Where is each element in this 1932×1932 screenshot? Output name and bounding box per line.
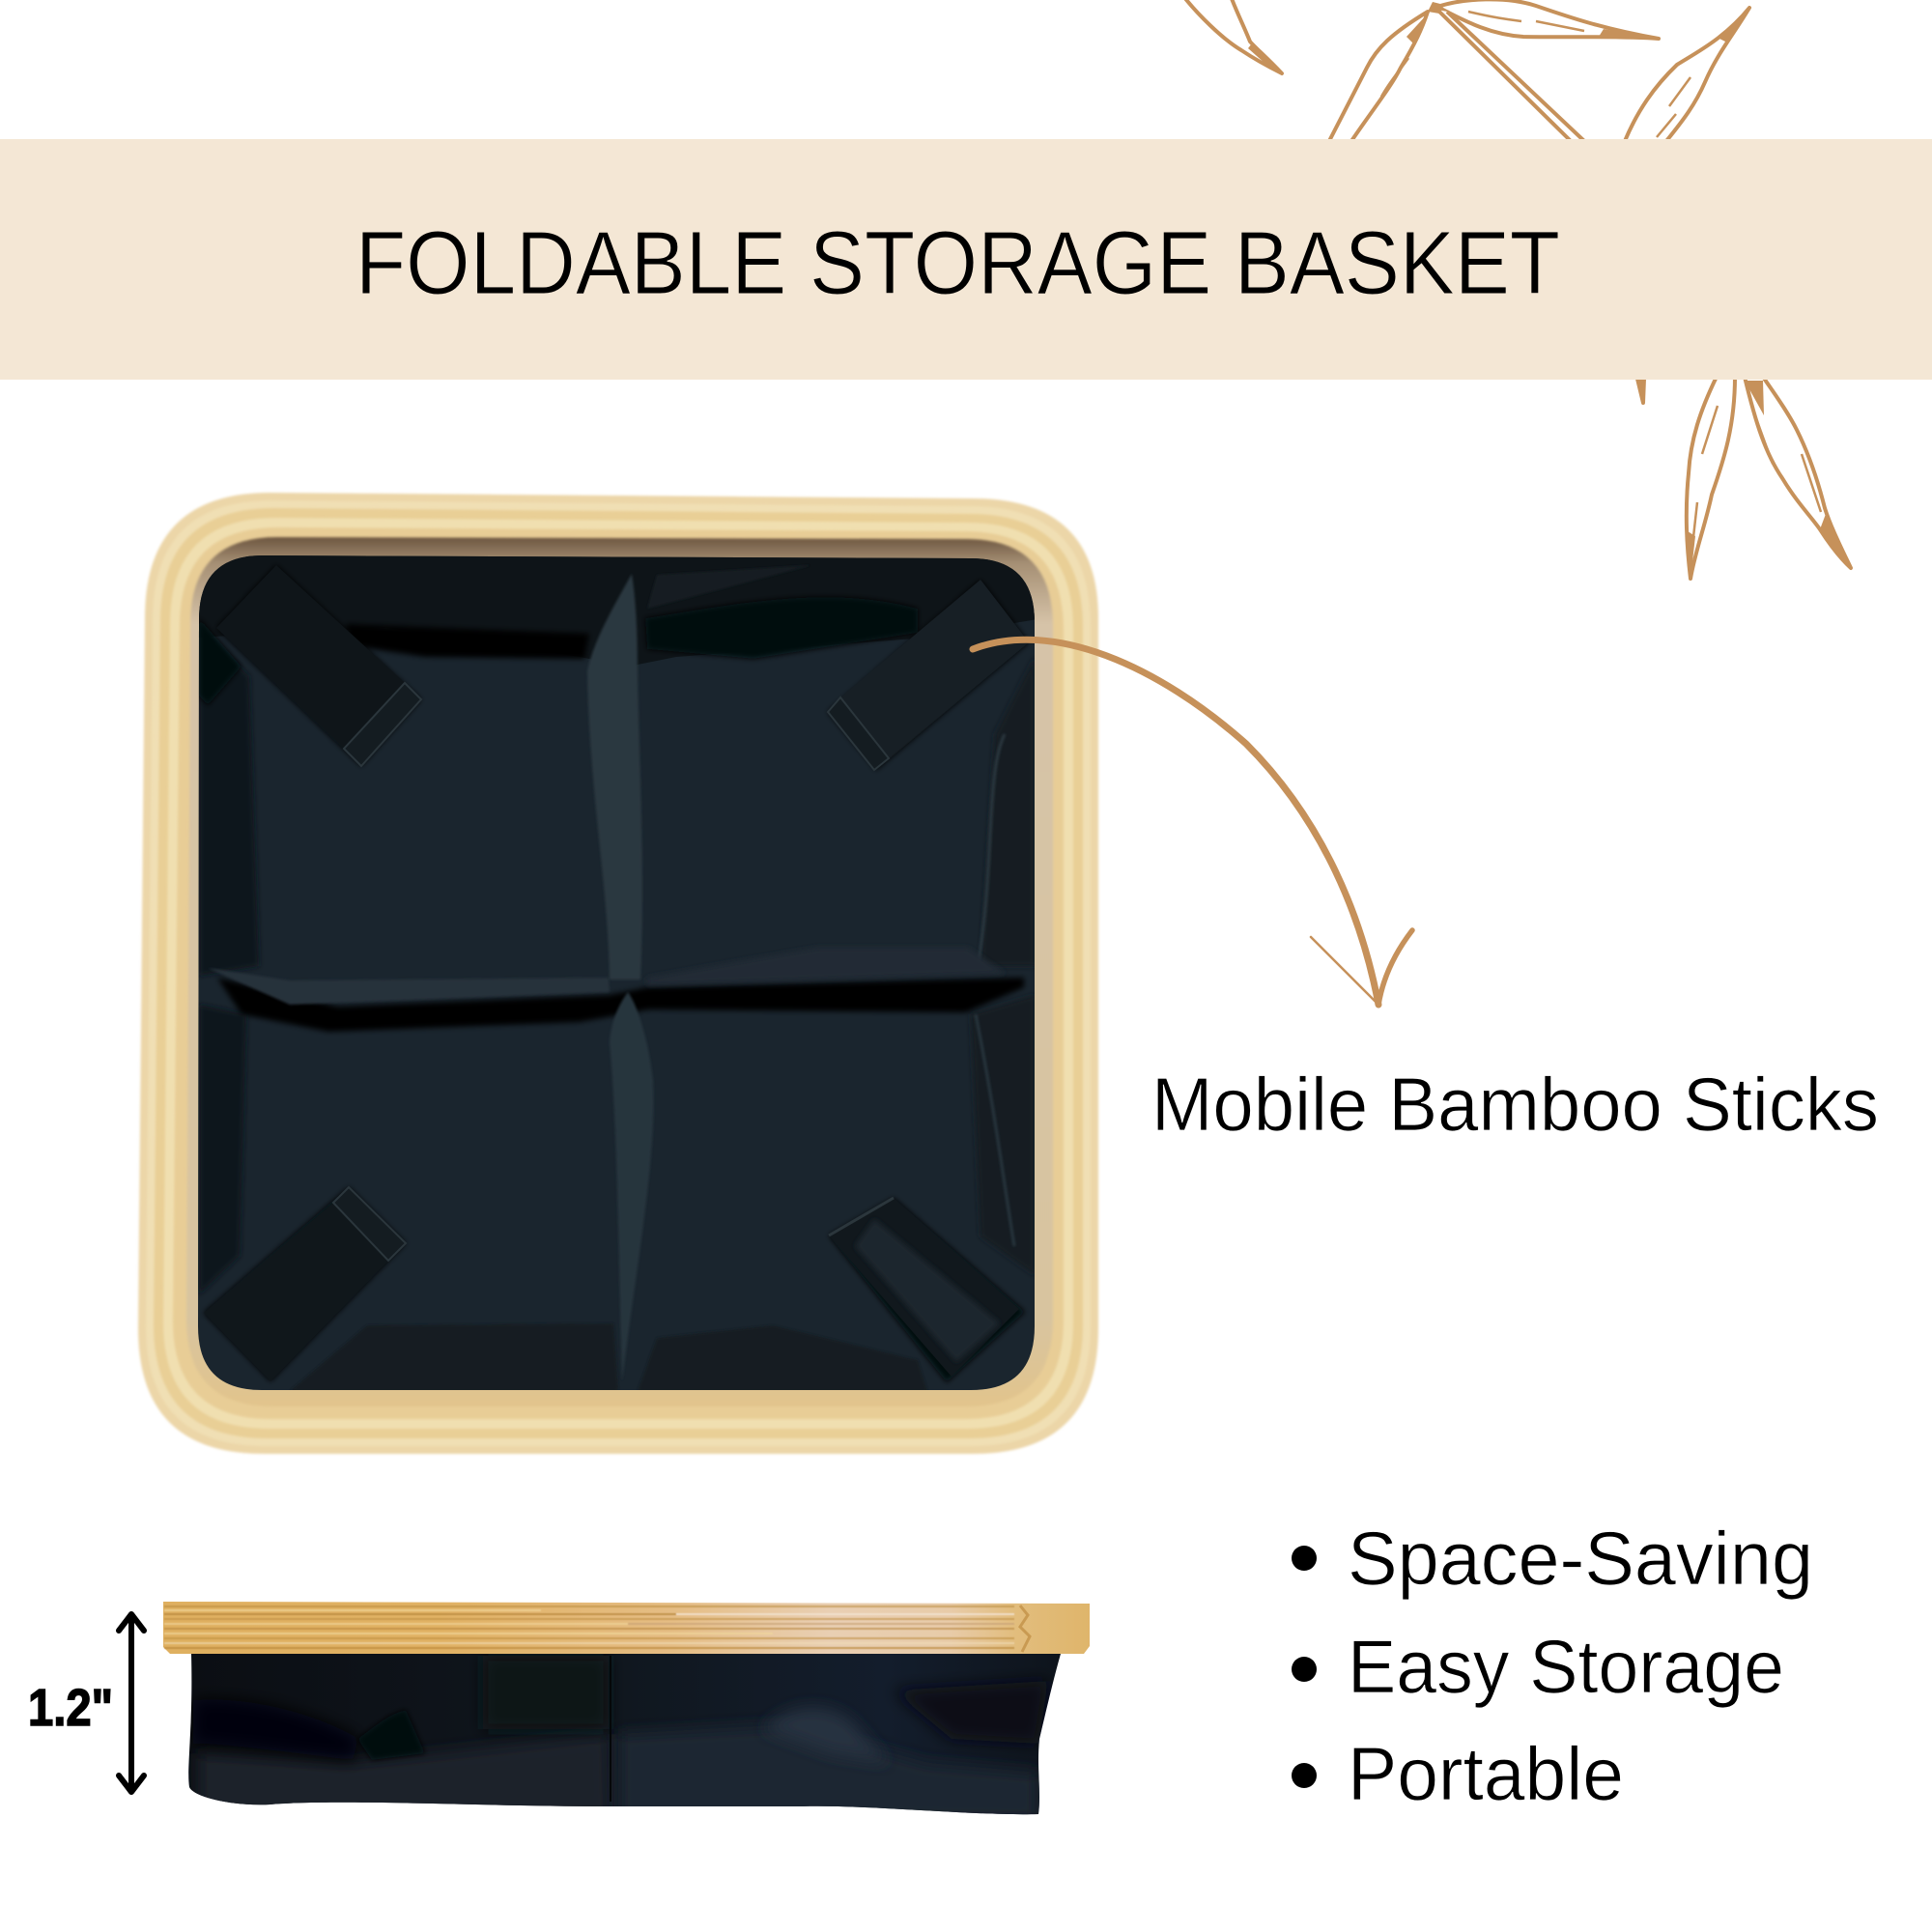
height label: 1.2" [28, 1679, 113, 1737]
callout label: Mobile Bamboo Sticks [1151, 1062, 1879, 1147]
dimension arrow [119, 1614, 144, 1792]
feature: portable: Portable [1348, 1731, 1624, 1816]
feature list [1292, 1516, 1813, 1816]
vertical divider [587, 574, 642, 980]
straps [199, 565, 1029, 1382]
bottom band [290, 1323, 618, 1391]
decorative bamboo leaves [1183, 0, 1851, 579]
top shadow band [193, 551, 1043, 667]
feature: space-saving: Space-Saving [1348, 1516, 1813, 1601]
bamboo rim [163, 1602, 1090, 1654]
curved arrow pointing to bamboo sticks [973, 639, 1412, 1005]
title banner [0, 139, 1932, 380]
title text: FOLDABLE STORAGE BASKET [355, 213, 1560, 313]
product photo: basket side view [163, 1602, 1090, 1821]
bamboo frame [138, 493, 1098, 1454]
side creases [199, 628, 259, 976]
feature: easy storage: Easy Storage [1348, 1624, 1784, 1709]
horizontal seam [217, 978, 1024, 1032]
product photo: basket top view [138, 493, 1098, 1454]
fabric body [188, 1654, 1061, 1821]
fabric interior with dividers and straps [193, 551, 1043, 1401]
